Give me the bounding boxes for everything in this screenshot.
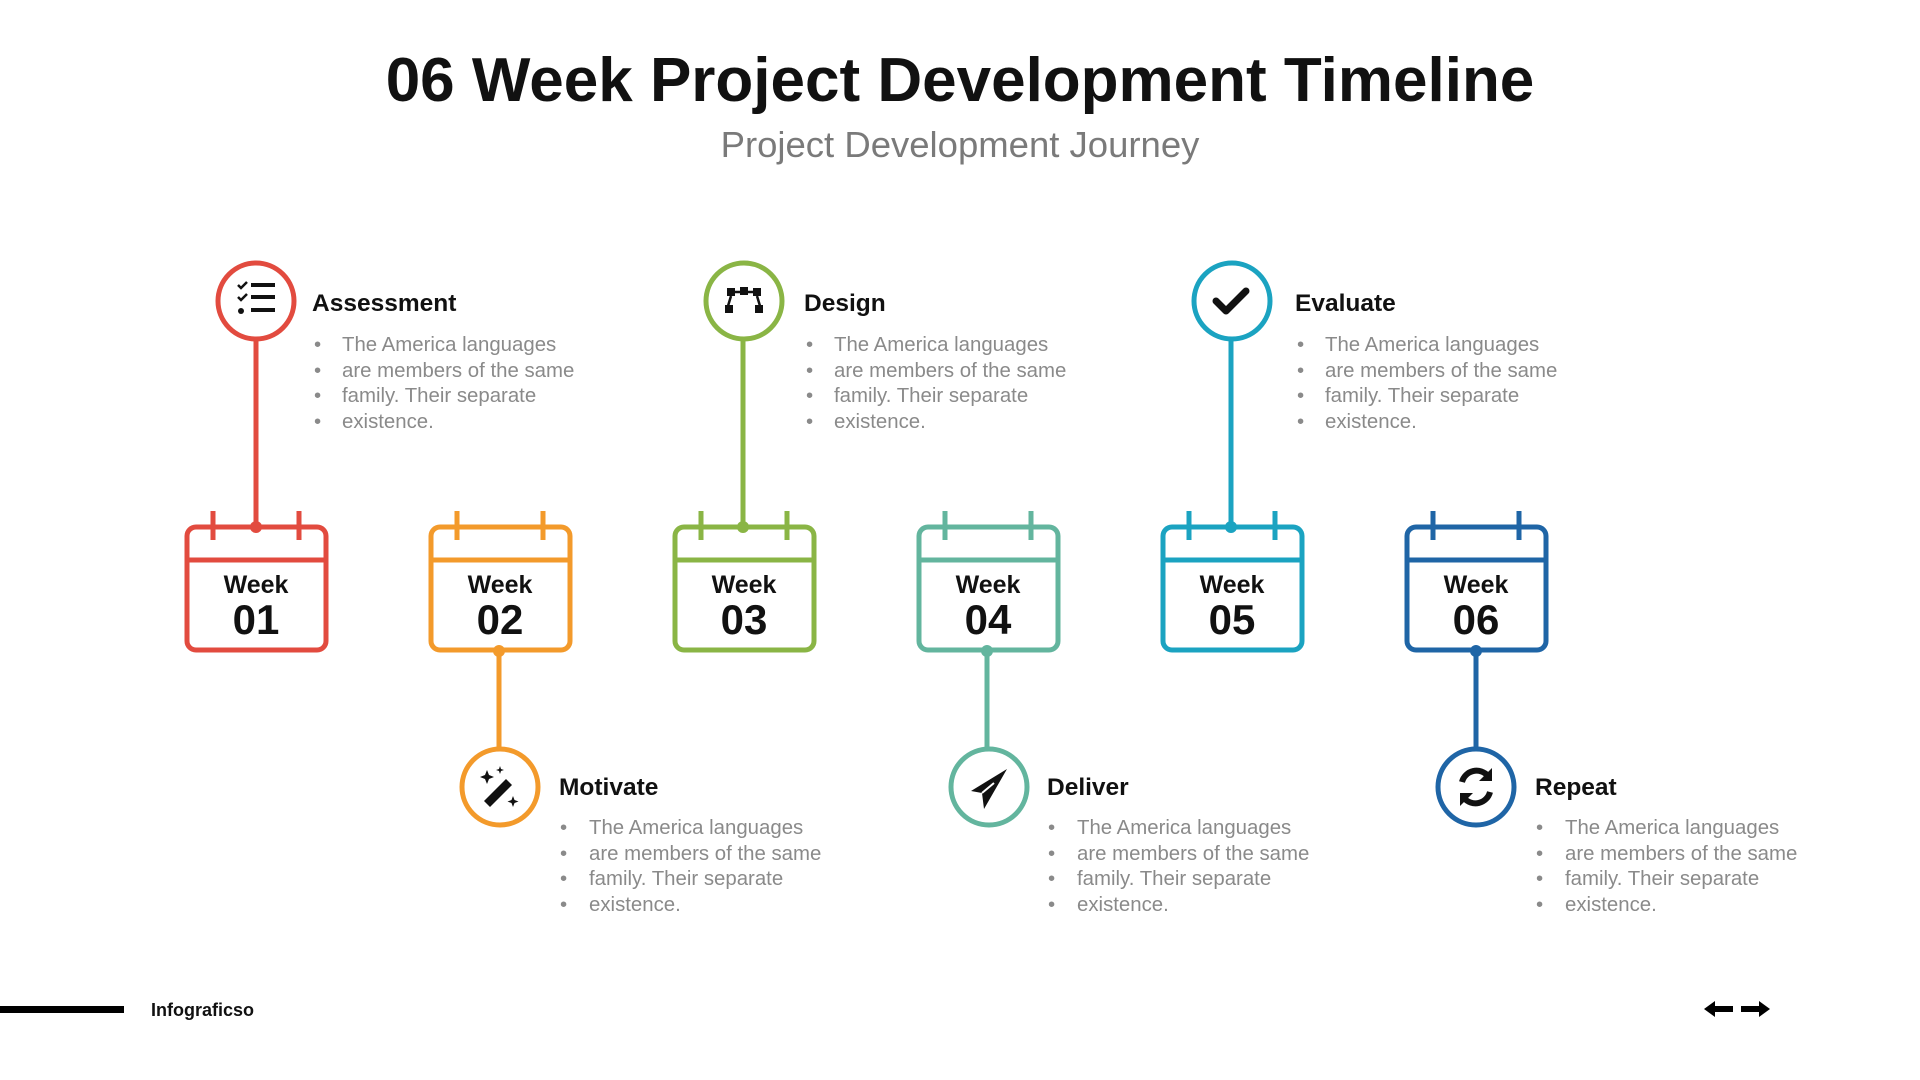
calendar week 06: 06 [1453,596,1499,643]
text: Motivate: existence. [589,894,681,916]
text: Assessment: • [314,334,321,356]
text: Evaluate: • [1297,385,1304,407]
text: Deliver: • [1048,817,1055,839]
text: Repeat: Repeat [1535,774,1617,801]
text: Evaluate: existence. [1325,411,1417,433]
text: Motivate [559,774,821,916]
text: Motivate: • [560,817,567,839]
text: Design: • [806,360,813,382]
text: Deliver: existence. [1077,894,1169,916]
text: Deliver: The America languages [1077,817,1291,839]
icon: vector design [706,263,782,339]
text: Evaluate: • [1297,411,1304,433]
calendar week 03: 03 [721,596,767,643]
text: Design: are members of the same [834,360,1066,382]
text: Evaluate: • [1297,334,1304,356]
icon: checklist [218,263,294,339]
step 6: Repeat [1407,511,1797,916]
step 3: Design [675,263,1066,650]
calendar week 03: Week [712,571,777,599]
text: Deliver: • [1048,843,1055,865]
text: Repeat [1535,774,1797,916]
step 1: Assessment [187,263,574,650]
text: Deliver [1047,774,1309,916]
text: Repeat: The America languages [1565,817,1779,839]
text: Assessment: family. Their separate [342,385,536,407]
calendar week 02 [431,511,570,657]
calendar week 05: 05 [1209,596,1255,643]
text: Repeat: • [1536,868,1543,890]
calendar week 01 [187,511,326,650]
text: Assessment: • [314,360,321,382]
calendar week 02: Week [468,571,533,599]
text: Deliver: Deliver [1047,774,1129,801]
text: Motivate: family. Their separate [589,868,783,890]
text: Assessment: existence. [342,411,434,433]
text: Design: Design [804,290,886,317]
calendar week 06 [1407,511,1546,657]
icon: magic wand [462,749,538,825]
title: 06 Week Project Development Timeline [386,46,1534,115]
icon: paper plane [951,749,1027,825]
text: Evaluate: are members of the same [1325,360,1557,382]
calendar week 06: Week [1444,571,1509,599]
calendar week 04: 04 [965,596,1012,643]
footer brand: Infograficso [151,1000,254,1020]
footer bar [0,1006,124,1013]
calendar week 01: Week [224,571,289,599]
text: Evaluate: family. Their separate [1325,385,1519,407]
text: Evaluate: • [1297,360,1304,382]
text: Repeat: • [1536,843,1543,865]
step 2: Motivate [431,511,821,916]
calendar week 02: 02 [477,596,523,643]
text: Repeat: existence. [1565,894,1657,916]
calendar week 05: Week [1200,571,1265,599]
text: Design: family. Their separate [834,385,1028,407]
text: Motivate: are members of the same [589,843,821,865]
text: Motivate: • [560,843,567,865]
text: Assessment: • [314,385,321,407]
text: Deliver: • [1048,868,1055,890]
text: Assessment: • [314,411,321,433]
text: Motivate: • [560,894,567,916]
text: Evaluate: Evaluate [1295,290,1396,317]
calendar week 01: 01 [233,596,279,643]
text: Assessment: Assessment [312,290,456,317]
icon: nav arrows [1704,1001,1770,1017]
calendar week 03 [675,511,814,650]
text: Repeat: • [1536,894,1543,916]
text: Evaluate [1295,290,1557,433]
text: Repeat: family. Their separate [1565,868,1759,890]
calendar week 04: Week [956,571,1021,599]
text: Motivate: The America languages [589,817,803,839]
text: Assessment [312,290,574,433]
text: Deliver: family. Their separate [1077,868,1271,890]
text: Evaluate: The America languages [1325,334,1539,356]
text: Design [804,290,1066,433]
text: Design: • [806,334,813,356]
text: Design: existence. [834,411,926,433]
text: Assessment: The America languages [342,334,556,356]
calendar week 04 [919,511,1058,657]
step 4: Deliver [919,511,1309,916]
text: Design: • [806,411,813,433]
calendar week 05 [1163,511,1302,650]
text: Deliver: • [1048,894,1055,916]
text: Repeat: are members of the same [1565,843,1797,865]
icon: refresh [1438,749,1514,825]
icon: check badge [1194,263,1270,339]
subtitle: Project Development Journey [721,124,1200,165]
text: Design: • [806,385,813,407]
text: Motivate: • [560,868,567,890]
step 5: Evaluate [1163,263,1557,650]
text: Assessment: are members of the same [342,360,574,382]
text: Design: The America languages [834,334,1048,356]
text: Deliver: are members of the same [1077,843,1309,865]
text: Motivate: Motivate [559,774,658,801]
text: Repeat: • [1536,817,1543,839]
